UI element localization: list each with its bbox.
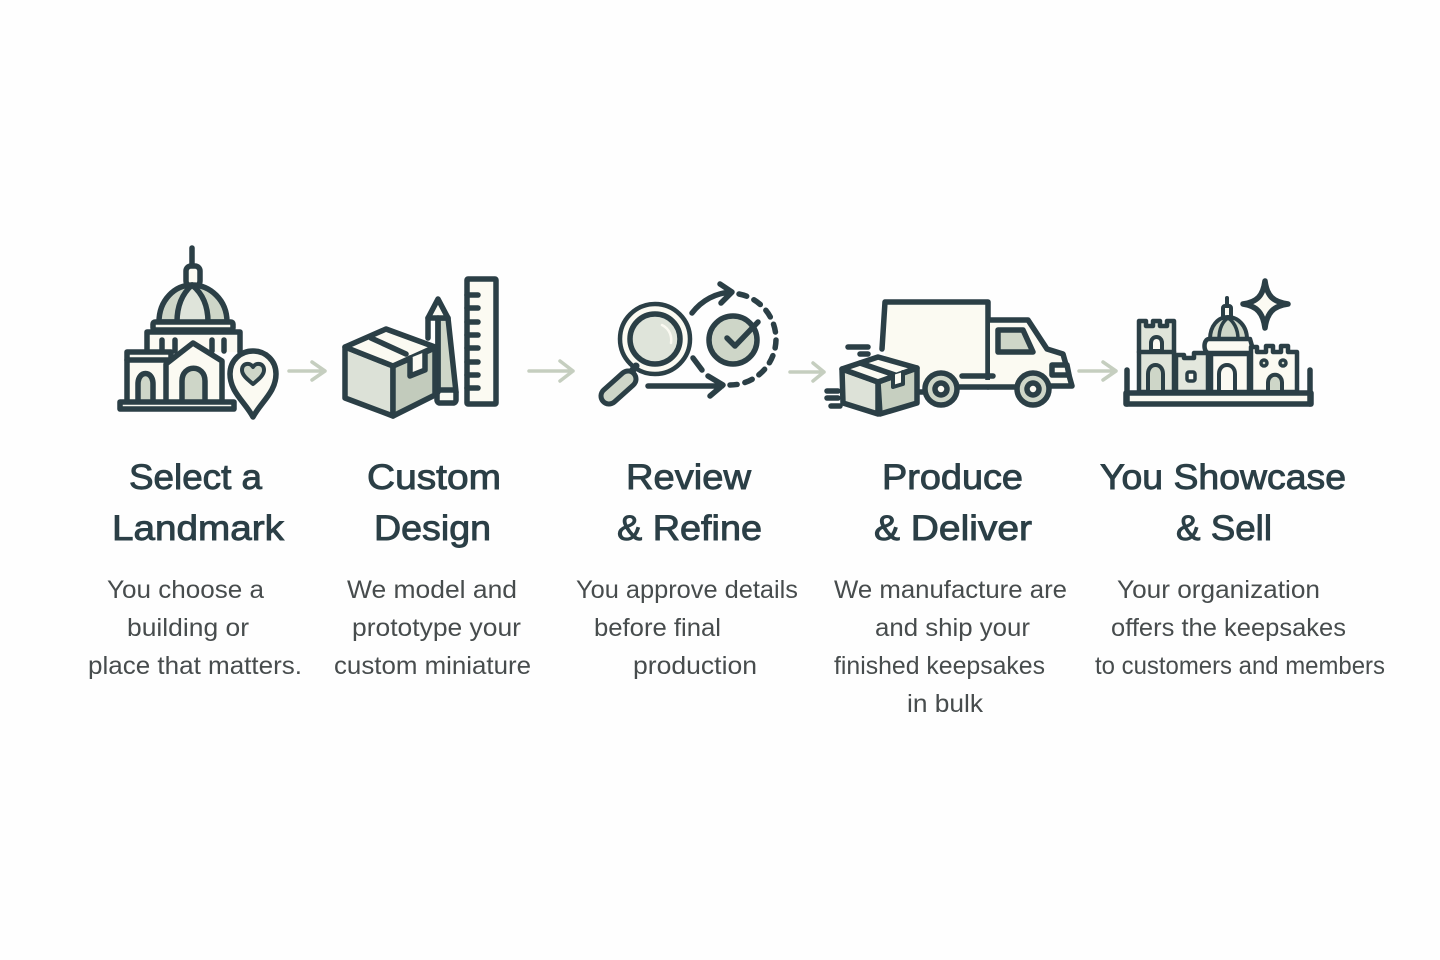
heading: produce and deliver: & Deliver [874, 509, 1032, 548]
icon: magnifier and approval cycle [609, 284, 776, 396]
text: step 4 description: We manufacture are [834, 576, 1067, 604]
icon: delivery truck and parcel [827, 302, 1072, 414]
text: step 3 description: You approve details [576, 576, 798, 604]
text: step 4 description: and ship your [875, 614, 1030, 642]
text: step 2 description: prototype your [352, 614, 521, 642]
heading: select a landmark: Landmark [112, 509, 285, 548]
heading: custom design: Custom [367, 458, 501, 497]
icon: landmark skyline with sparkle [1126, 281, 1311, 404]
text: step 4 description [834, 576, 1067, 718]
heading: custom design [367, 458, 501, 548]
text: step 1 description [88, 576, 302, 680]
text: step 5 description: Your organization [1117, 576, 1320, 604]
text: step 3 description: before final [594, 614, 721, 642]
heading: custom design: Design [374, 509, 491, 548]
icon: domed landmark with location pin [120, 248, 276, 417]
text: step 3 description [576, 576, 798, 680]
text: step 1 description: You choose a [107, 576, 264, 604]
heading: select a landmark [112, 458, 285, 548]
heading: review and refine [617, 458, 762, 548]
step 1: select a landmark [88, 248, 302, 680]
heading: review and refine: & Refine [617, 509, 762, 548]
arrow: step 1 to 2 [289, 362, 325, 380]
text: step 5 description: offers the keepsakes [1111, 614, 1346, 642]
arrow: step 4 to 5 [1079, 362, 1116, 380]
text: step 4 description: finished keepsakes [834, 652, 1045, 680]
text: step 2 description: We model and [347, 576, 517, 604]
text: step 4 description: in bulk [907, 690, 984, 718]
text: step 2 description [334, 576, 531, 680]
heading: you showcase and sell [1100, 458, 1346, 548]
text: step 1 description: building or [127, 614, 249, 642]
text: step 5 description [1095, 576, 1385, 680]
text: step 1 description: place that matters. [88, 652, 302, 680]
icon: box, pencil and ruler [345, 279, 496, 416]
text: step 3 description: production [633, 652, 757, 680]
step 2: custom design [334, 279, 531, 680]
heading: review and refine: Review [626, 458, 752, 497]
text: step 5 description: to customers and members [1095, 652, 1385, 680]
step 5: you showcase and sell [1095, 281, 1385, 680]
heading: you showcase and sell: & Sell [1176, 509, 1272, 548]
step 3: review and refine [576, 284, 798, 680]
heading: select a landmark: Select a [129, 458, 263, 497]
arrow: step 2 to 3 [529, 361, 573, 381]
heading: produce and deliver [874, 458, 1032, 548]
heading: produce and deliver: Produce [882, 458, 1023, 497]
heading: you showcase and sell: You Showcase [1100, 458, 1346, 497]
arrow: step 3 to 4 [790, 363, 824, 381]
text: step 2 description: custom miniature [334, 652, 531, 680]
step 4: produce and deliver [827, 302, 1072, 718]
